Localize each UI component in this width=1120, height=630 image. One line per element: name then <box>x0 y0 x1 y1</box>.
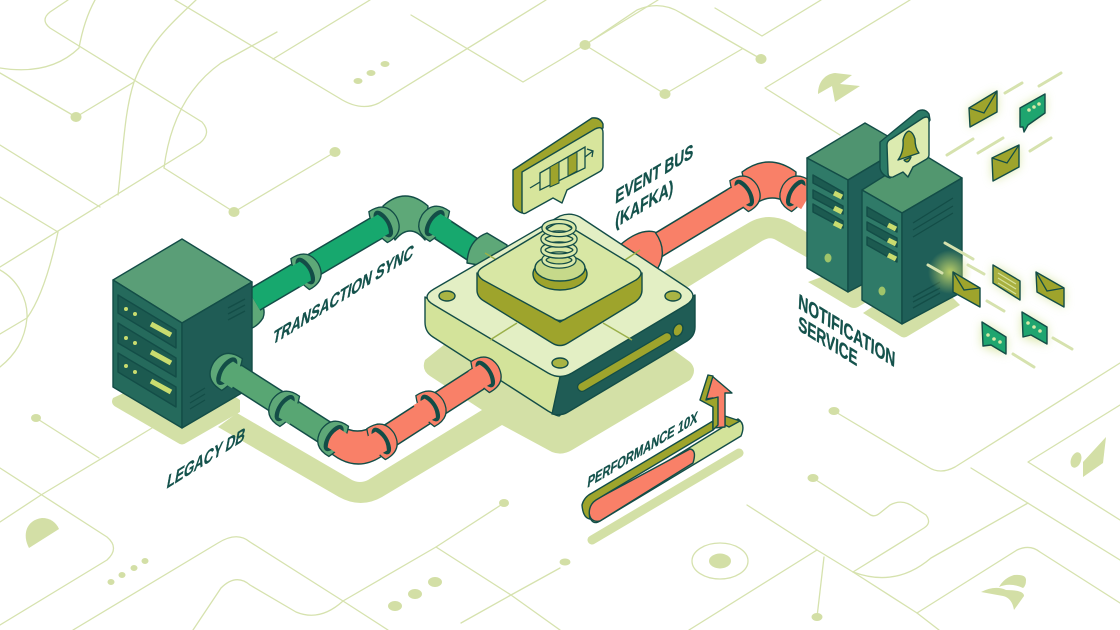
icon: queue with arrow <box>530 147 593 190</box>
spring <box>533 222 587 290</box>
callout: event queue speech bubble <box>513 118 603 214</box>
server: back <box>807 123 905 292</box>
server: front <box>862 153 962 324</box>
drive bays <box>118 295 176 407</box>
icon: envelope lower 1 <box>953 272 980 307</box>
ground shadow: performance bar <box>592 453 739 540</box>
callout: bell notification <box>880 110 930 178</box>
label: service: SERVICE <box>798 312 858 371</box>
performance bar with arrow <box>582 375 743 523</box>
label: kafka: (KAFKA) <box>615 176 674 233</box>
glow near emitting server <box>928 250 972 294</box>
icon: envelope lower 2 <box>1036 272 1064 307</box>
label: legacy db: LEGACY DB <box>165 424 247 494</box>
envelope and chat glows <box>969 91 1064 354</box>
icon: bell <box>898 131 919 162</box>
notification service servers <box>807 110 962 324</box>
server: legacy database <box>113 239 252 428</box>
pipe: lower green to red into hub <box>203 347 487 464</box>
icon: chat lower 2 <box>1022 312 1047 344</box>
motion streaks <box>928 73 1072 367</box>
label: notification: NOTIFICATION <box>798 290 896 372</box>
ground shadow: upper strip to notification service <box>660 217 808 287</box>
inner block <box>477 223 642 346</box>
growth arrow <box>700 375 732 430</box>
ground shadow: pipeline strip and hub footprint <box>218 340 694 503</box>
pipe: final red flange into hub <box>465 351 507 396</box>
pipe: transaction sync upper green <box>250 196 507 329</box>
screws <box>439 291 681 368</box>
label: transaction sync: TRANSACTION SYNC <box>271 241 415 350</box>
label: performance 10x: PERFORMANCE 10X <box>587 408 699 492</box>
icon: envelope upper 1 <box>969 91 997 127</box>
hub slot and status light <box>582 322 685 387</box>
label: event bus: EVENT BUS <box>615 140 694 209</box>
ground shadow: legacy database <box>112 360 240 444</box>
pipe: red output to notification service <box>620 162 816 272</box>
notifications: envelopes and chats <box>953 91 1064 354</box>
ground shadow: notification servers <box>808 270 960 338</box>
icon: chat upper <box>1020 94 1045 132</box>
event bus hub <box>425 214 695 416</box>
icon: chat lower 1 <box>982 322 1006 354</box>
icon: envelope upper 2 <box>992 145 1019 181</box>
icon: document lower <box>993 265 1020 300</box>
